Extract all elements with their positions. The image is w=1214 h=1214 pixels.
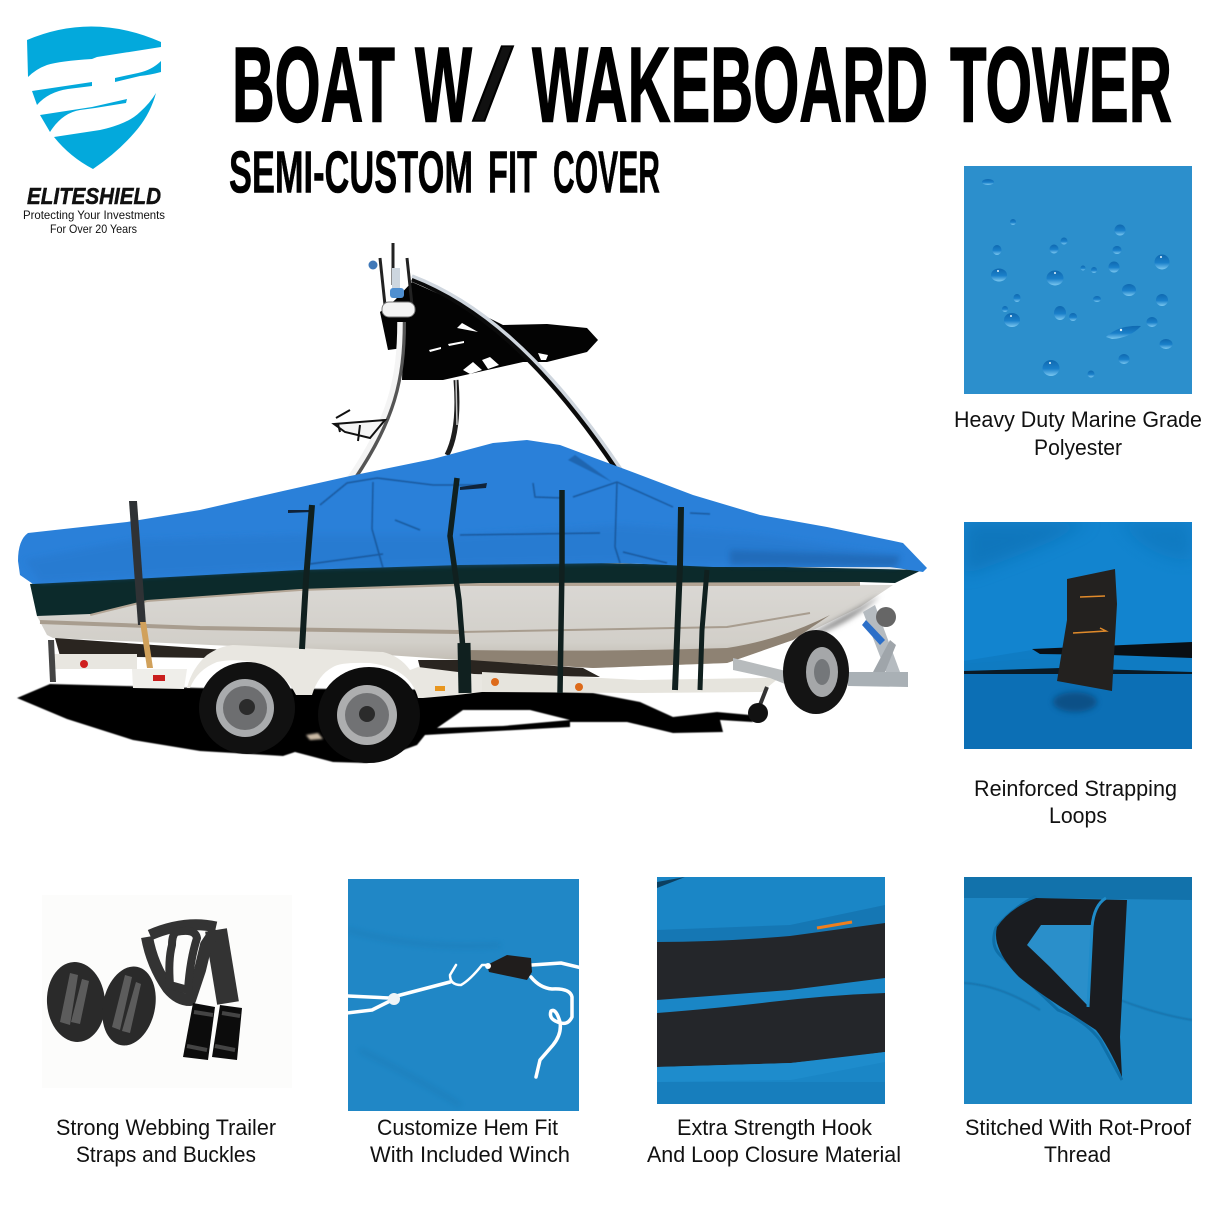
brand name: ELITESHIELD	[27, 183, 161, 209]
caption	[647, 1115, 901, 1167]
support pole	[129, 501, 153, 668]
seam photo	[964, 877, 1192, 1104]
tagline: Protecting Your Investments	[23, 208, 165, 222]
wakeboard tower	[334, 243, 628, 482]
subtitle: SEMI-CUSTOM	[229, 140, 473, 206]
dark gunwale stripe	[30, 560, 922, 616]
straps photo	[42, 895, 292, 1088]
panel: hem winch	[347, 879, 582, 1167]
logo: EliteShield	[23, 26, 165, 236]
caption: And Loop Closure Material	[647, 1142, 901, 1167]
panel: water-resistant polyester	[954, 166, 1202, 460]
caption	[56, 1115, 276, 1167]
caption: Straps and Buckles	[76, 1142, 256, 1167]
subtitle: COVER	[553, 140, 660, 206]
caption: Thread	[1044, 1142, 1111, 1167]
under hull gap	[55, 638, 600, 677]
caption: Stitched With Rot-Proof	[965, 1115, 1192, 1140]
cover	[18, 440, 927, 584]
loop photo	[964, 522, 1192, 749]
tagline: For Over 20 Years	[50, 222, 137, 236]
caption: With Included Winch	[370, 1142, 570, 1167]
caption: Loops	[1049, 803, 1107, 828]
caption: Polyester	[1034, 435, 1122, 460]
panel: reinforced strapping loops	[964, 522, 1192, 828]
fabric swatch with water drops	[964, 166, 1192, 394]
panel: stitched seam	[964, 877, 1192, 1167]
subtitle: FIT	[488, 140, 537, 206]
hull	[37, 582, 893, 668]
title: W	[415, 24, 472, 144]
caption	[954, 407, 1202, 460]
caption	[965, 1115, 1192, 1167]
ground shadow	[17, 684, 753, 763]
panel: straps and buckles	[42, 895, 292, 1167]
tagline	[23, 208, 165, 236]
caption: Extra Strength Hook	[677, 1115, 873, 1140]
caption: Reinforced Strapping	[974, 776, 1177, 801]
title: BOAT	[232, 24, 395, 144]
winch photo	[347, 879, 582, 1111]
caption: Strong Webbing Trailer	[56, 1115, 276, 1140]
panel: hook and loop closure	[647, 877, 901, 1167]
wheels	[199, 630, 849, 763]
caption	[370, 1115, 570, 1167]
caption: Heavy Duty Marine Grade	[954, 407, 1202, 432]
caption: Customize Hem Fit	[377, 1115, 558, 1140]
icon: shield	[27, 26, 161, 169]
boat on trailer with cover	[17, 243, 927, 763]
velcro photo	[657, 877, 885, 1104]
tie-down straps	[302, 478, 707, 693]
caption	[974, 776, 1177, 828]
title	[232, 24, 1172, 144]
trailer	[48, 605, 908, 723]
title: /	[473, 28, 514, 142]
